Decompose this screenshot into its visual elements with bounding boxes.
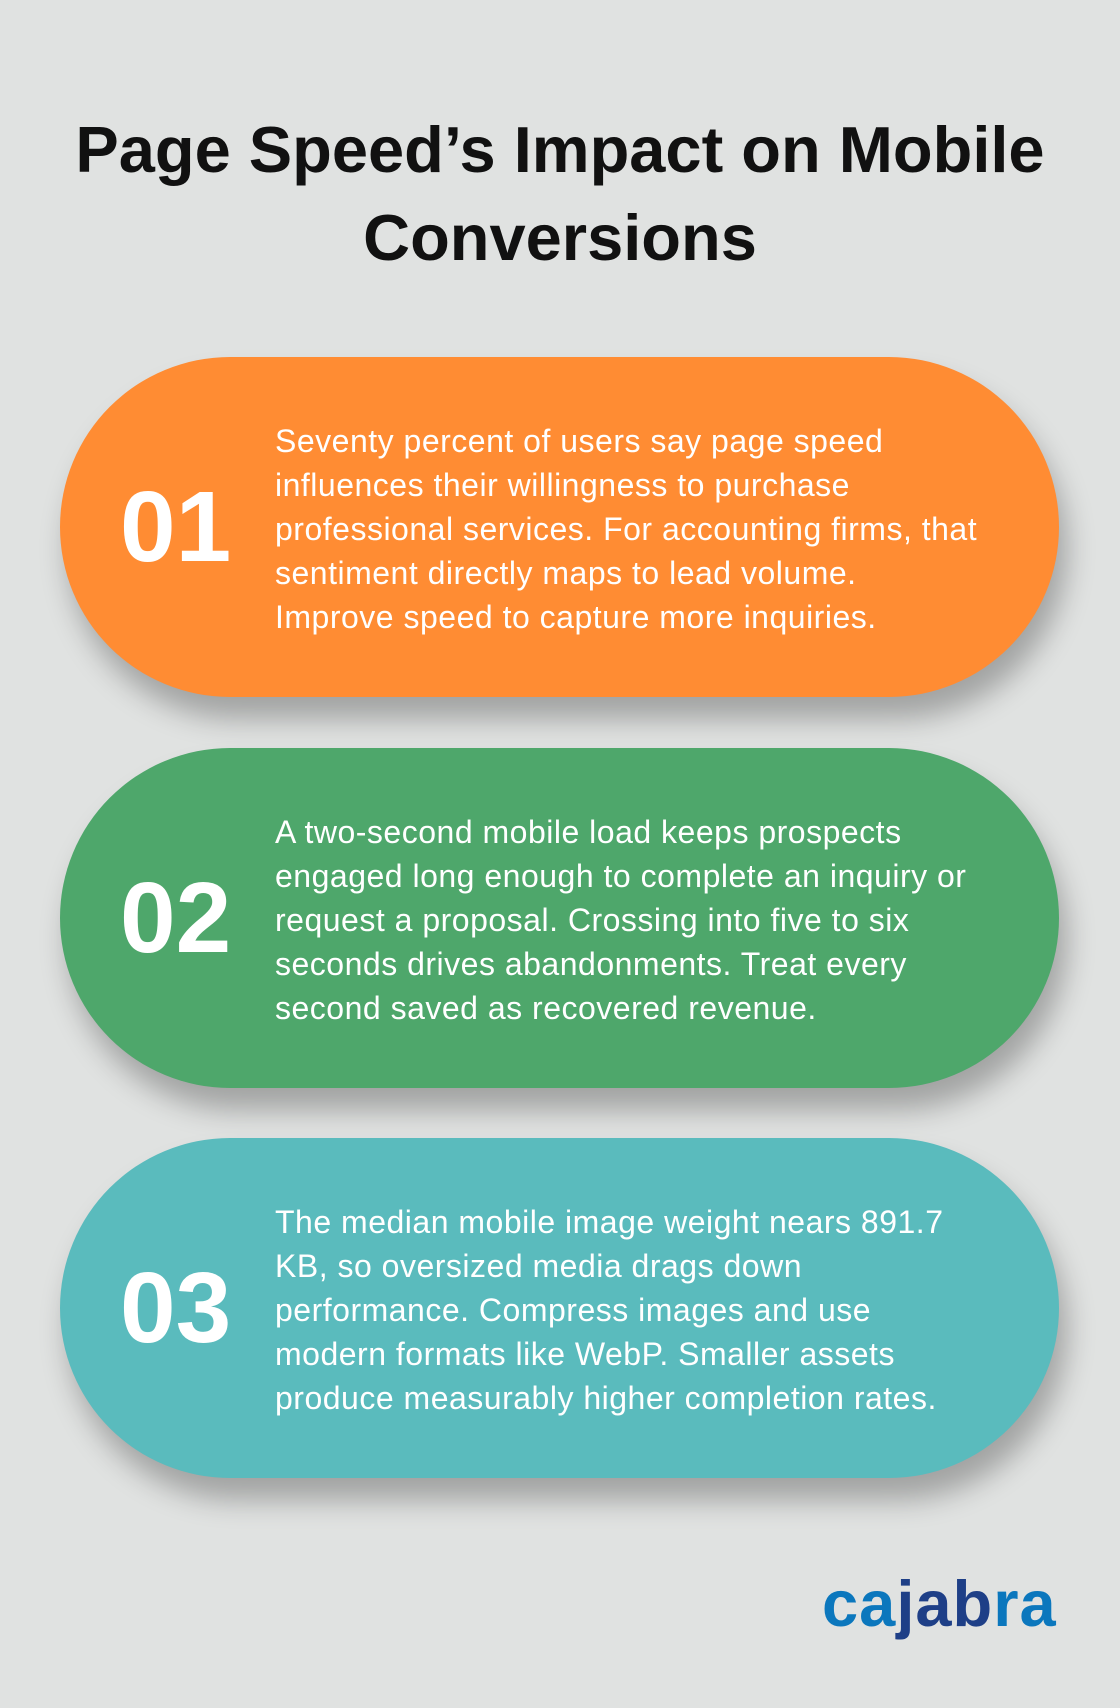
text 03: performance. Compress images and use bbox=[275, 1292, 871, 1328]
text 02: engaged long enough to complete an inquiry or bbox=[275, 858, 966, 894]
text 03: modern formats like WebP. Smaller assets bbox=[275, 1336, 895, 1372]
text 03 bbox=[275, 1204, 943, 1416]
text 01: Improve speed to capture more inquiries. bbox=[275, 599, 877, 635]
title: Page Speed’s Impact on Mobile bbox=[75, 113, 1045, 186]
number 03: 03 bbox=[120, 1252, 231, 1364]
text 02: seconds drives abandonments. Treat every bbox=[275, 946, 907, 982]
text 01: influences their willingness to purchase bbox=[275, 467, 850, 503]
title bbox=[75, 113, 1045, 274]
text 02: A two-second mobile load keeps prospects bbox=[275, 814, 902, 850]
text 02: request a proposal. Crossing into five to six bbox=[275, 902, 909, 938]
text 01: sentiment directly maps to lead volume. bbox=[275, 555, 857, 591]
number 02: 02 bbox=[120, 862, 231, 974]
text 01: Seventy percent of users say page speed bbox=[275, 423, 883, 459]
text 03: The median mobile image weight nears 891.7 bbox=[275, 1204, 943, 1240]
text 02: second saved as recovered revenue. bbox=[275, 990, 817, 1026]
text 01 bbox=[275, 423, 977, 635]
logo: cajabra bbox=[822, 1567, 1057, 1640]
text 03: KB, so oversized media drags down bbox=[275, 1248, 802, 1284]
text 03: produce measurably higher completion rates. bbox=[275, 1380, 937, 1416]
title: Conversions bbox=[363, 201, 757, 274]
panel: 03 bbox=[60, 1138, 1059, 1478]
panel: 01 bbox=[60, 357, 1059, 697]
panel: 02 bbox=[60, 748, 1059, 1088]
number 01: 01 bbox=[120, 471, 231, 583]
text 02 bbox=[275, 814, 966, 1026]
text 01: professional services. For accounting firms, that bbox=[275, 511, 977, 547]
